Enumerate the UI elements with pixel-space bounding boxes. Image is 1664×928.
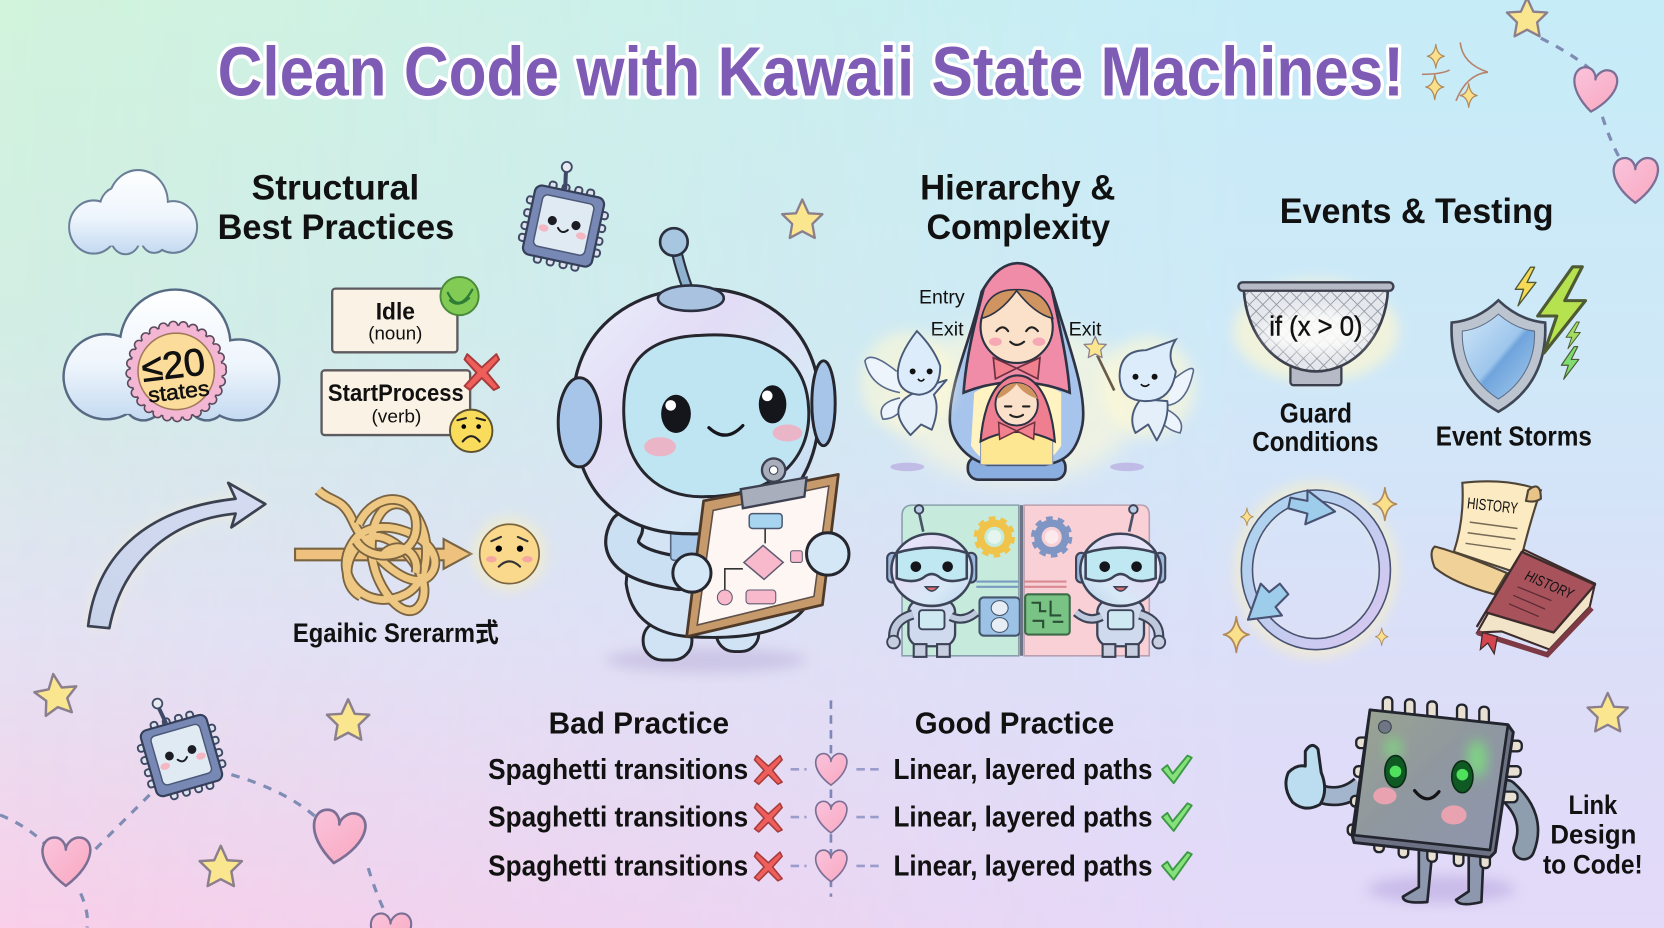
icon: star bbox=[1588, 693, 1628, 731]
card: idle noun bbox=[332, 289, 457, 352]
divider: dashed comparison line bbox=[830, 700, 832, 897]
row: comparison three: Spaghetti transitions bbox=[488, 850, 748, 882]
decoration: bottom-left path with chip, stars and hearts bbox=[0, 671, 411, 928]
label: guard conditions bbox=[1252, 397, 1379, 457]
row: comparison two: Linear, layered paths bbox=[894, 802, 1152, 834]
icon: right fairy with wand bbox=[1084, 336, 1195, 471]
heading: structural best practices: Structural bbox=[252, 169, 419, 208]
row: comparison three bbox=[488, 850, 1192, 882]
heading: events and testing: Events & Testing bbox=[1280, 192, 1554, 231]
clipboard bbox=[687, 458, 838, 637]
row: comparison one: Spaghetti transitions bbox=[488, 754, 748, 786]
icon: title sparkles bbox=[1422, 42, 1488, 107]
card: idle noun: (noun) bbox=[368, 324, 422, 344]
icon: cloud with 20 states badge: states bbox=[147, 377, 211, 408]
title: Clean Code with Kawaii State Machines! bbox=[218, 33, 1404, 111]
heading: structural best practices bbox=[218, 169, 454, 247]
text: link design to code: Design bbox=[1550, 820, 1636, 850]
text: link design to code bbox=[1543, 790, 1643, 879]
card: startprocess verb bbox=[322, 370, 470, 435]
icon: history book: HISTORY bbox=[1522, 568, 1576, 603]
icon: star bbox=[782, 200, 822, 238]
labels: entry and exit: Entry bbox=[919, 287, 965, 308]
arrow: smooth curved path bbox=[88, 483, 265, 628]
text: link design to code: Link bbox=[1568, 790, 1617, 820]
icon: left fairy bbox=[861, 331, 954, 471]
icon: shield with lightning bbox=[1452, 267, 1585, 412]
icon: yellow sad face bbox=[450, 410, 492, 452]
heading: hierarchy and complexity: Complexity bbox=[926, 208, 1111, 247]
label: guard conditions: Guard bbox=[1280, 397, 1352, 428]
label: guard conditions: Conditions bbox=[1252, 426, 1379, 457]
card: startprocess verb: (verb) bbox=[371, 406, 421, 426]
heading: good practice: Good Practice bbox=[915, 705, 1114, 740]
icon: small cloud bbox=[69, 170, 197, 254]
icon: small chip mascot bbox=[514, 155, 617, 275]
heading: hierarchy and complexity: Hierarchy & bbox=[920, 169, 1115, 208]
illustration: nested matryoshka doll bbox=[895, 263, 1139, 483]
row: comparison one: Linear, layered paths bbox=[894, 754, 1152, 786]
heading: structural best practices: Best Practices bbox=[218, 208, 454, 247]
icon: circular test loop arrows bbox=[1224, 488, 1397, 652]
card: idle noun: Idle bbox=[376, 298, 415, 325]
illustration: main robot with clipboard bbox=[558, 228, 849, 673]
decoration: top-right path with star and hearts bbox=[1507, 0, 1658, 203]
row: comparison one bbox=[488, 754, 1192, 786]
row: comparison three: Linear, layered paths bbox=[894, 850, 1152, 882]
labels: entry and exit: Exit bbox=[1069, 319, 1102, 340]
icon: guard condition mesh bowl bbox=[1233, 280, 1399, 385]
heading: bad practice: Bad Practice bbox=[549, 705, 729, 740]
card: startprocess verb: StartProcess bbox=[328, 380, 464, 407]
heading: hierarchy and complexity bbox=[920, 169, 1115, 247]
panel: split robots comparison bbox=[887, 505, 1165, 657]
label: event storms: Event Storms bbox=[1436, 421, 1592, 452]
icon: guard condition mesh bowl: if (x > 0) bbox=[1269, 310, 1363, 341]
icon: green check badge bbox=[440, 277, 479, 315]
icon: history book bbox=[1477, 550, 1595, 655]
icon: red cross bbox=[465, 354, 499, 390]
row: comparison two bbox=[488, 801, 1192, 834]
icon: cloud with 20 states badge bbox=[64, 290, 279, 420]
icon: history scroll bbox=[1432, 481, 1541, 594]
caption: garbled label: Egaihic Srerarm式 bbox=[293, 618, 499, 648]
row: comparison two: Spaghetti transitions bbox=[488, 802, 748, 834]
icon: history scroll: HISTORY bbox=[1466, 495, 1519, 518]
labels: entry and exit bbox=[919, 287, 1102, 340]
labels: entry and exit: Exit bbox=[931, 319, 964, 340]
icon: tangled spaghetti arrow bbox=[295, 490, 471, 611]
illustration: thumbs-up chip mascot bbox=[1286, 697, 1528, 904]
text: link design to code: to Code! bbox=[1543, 849, 1643, 879]
icon: worried face bbox=[473, 518, 545, 590]
icon: cloud with 20 states badge: ≤20 bbox=[139, 340, 208, 391]
